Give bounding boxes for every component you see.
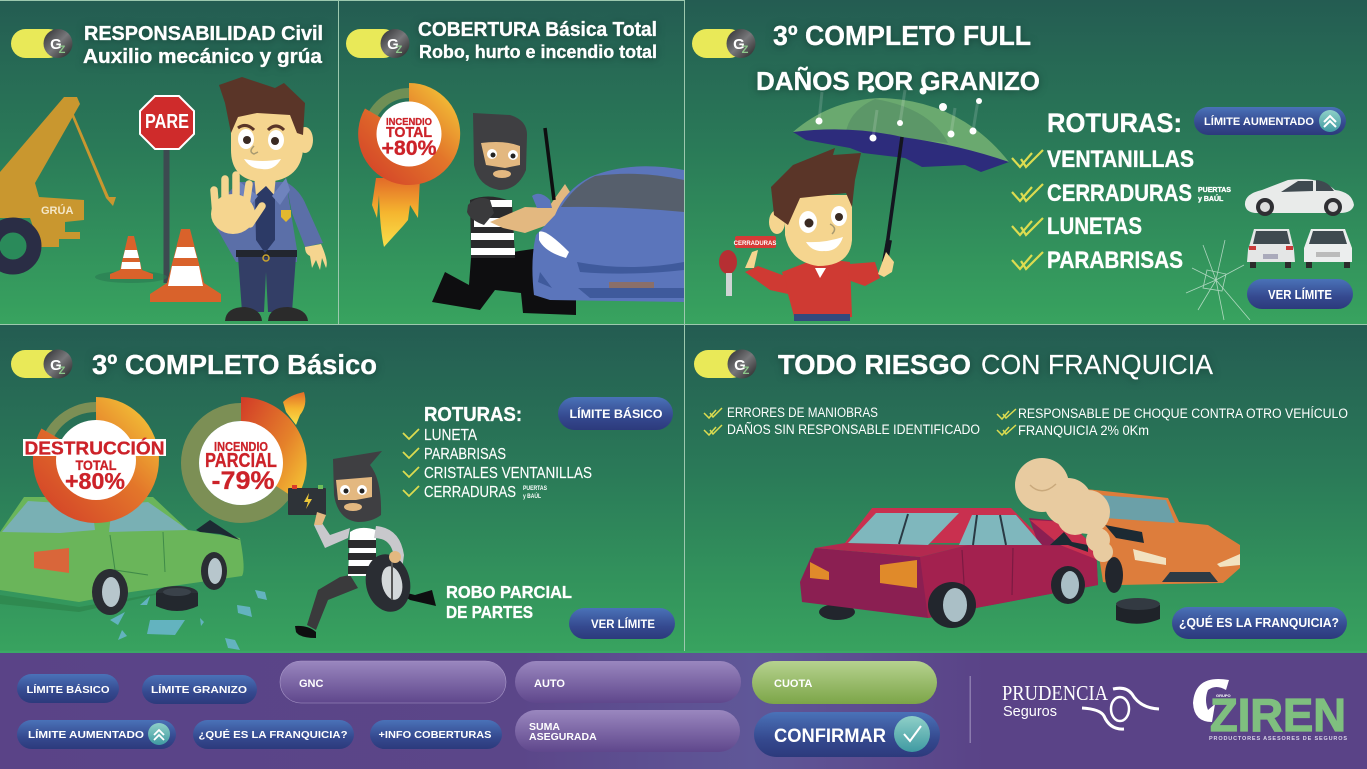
panel: todo riesgo con franquicia (685, 325, 1367, 652)
field: auto (515, 661, 741, 703)
button: limite aumentado: LÍMITE AUMENTADO (28, 728, 144, 741)
button: limite aumentado (17, 720, 176, 749)
stop sign (140, 96, 194, 283)
heading: Auxilio mecánico y grúa (83, 46, 323, 68)
toggle icon: Z (742, 44, 749, 56)
roturas list: PARABRISAS (1047, 247, 1183, 274)
card: cerraduras: CERRADURAS (734, 241, 776, 247)
roturas list: CERRADURAS (424, 484, 516, 501)
donut: destruccion total 80%: DESTRUCCIÓN (24, 438, 164, 458)
label: robo parcial: DE PARTES (446, 602, 533, 622)
heading: CON FRANQUICIA (981, 349, 1213, 380)
field: gnc: GNC (299, 678, 324, 690)
field: cuota (752, 661, 937, 704)
logo: prudencia seguros (1002, 681, 1159, 729)
label: robo parcial (446, 582, 572, 622)
heading (83, 23, 323, 68)
button: limite basico (558, 397, 673, 430)
toggle icon: G (734, 357, 746, 374)
button: limite aumentado: LÍMITE AUMENTADO (1204, 115, 1314, 128)
field: suma asegurada: SUMA (529, 721, 560, 733)
boy with keys (719, 148, 894, 321)
logo: prudencia seguros: Seguros (1003, 703, 1057, 720)
rear and front white cars (1247, 229, 1352, 268)
button: ver limite: VER LÍMITE (591, 616, 655, 631)
donut: incendio total 80% (358, 83, 460, 185)
heading: RESPONSABILIDAD Civil (84, 23, 323, 45)
field: cuota: CUOTA (774, 678, 812, 690)
roturas list: y BAÚL (523, 493, 541, 500)
button: info coberturas: +INFO COBERTURAS (378, 729, 492, 741)
tow truck: GRÚA (41, 204, 73, 217)
button: info coberturas (370, 720, 502, 749)
toggle icon (346, 29, 410, 58)
donut: destruccion total 80%: +80% (65, 468, 125, 494)
button: que es la franquicia: ¿QUÉ ES LA FRANQUICIA? (198, 728, 348, 741)
roturas list: y BAÚL (1198, 194, 1224, 203)
smoke cloud (1015, 458, 1113, 562)
panel: 3 completo basico (0, 325, 684, 652)
toggle icon: Z (743, 365, 750, 377)
donut: incendio parcial 79% (190, 392, 307, 514)
panel: cobertura basica total (339, 0, 684, 324)
button: limite granizo (142, 675, 257, 704)
flames (372, 178, 420, 247)
toggle icon: Z (396, 44, 403, 56)
logo: grupo ziren: PRODUCTORES ASESORES DE SEGUROS (1209, 736, 1347, 742)
toggle icon: G (50, 36, 62, 53)
loose tire (1116, 598, 1160, 624)
roturas list: VENTANILLAS (1047, 146, 1194, 173)
panel: responsabilidad civil (0, 0, 338, 324)
toggle icon: G (733, 36, 745, 53)
donut: incendio total 80%: INCENDIO (386, 116, 432, 128)
green damaged car (0, 497, 267, 650)
heading: COBERTURA Básica Total (418, 19, 657, 41)
footer bar (0, 652, 1367, 769)
toggle icon (11, 29, 72, 58)
traffic cones (95, 229, 221, 302)
roturas list: LUNETA (424, 427, 478, 444)
thief breaking into car (432, 113, 576, 315)
roturas list: ROTURAS: (424, 404, 522, 426)
logo: prudencia seguros: PRUDENCIA (1002, 681, 1109, 705)
button: que es la franquicia (193, 720, 354, 749)
button: limite basico: LÍMITE BÁSICO (570, 406, 662, 421)
donut: incendio parcial 79%: INCENDIO (214, 439, 268, 454)
panel: 3 completo full (685, 0, 1367, 324)
car battery (288, 485, 326, 515)
coverage checklist: DAÑOS SIN RESPONSABLE IDENTIFICADO (727, 422, 980, 437)
cracked glass (1186, 240, 1250, 320)
field: gnc (280, 661, 506, 703)
policeman character (211, 77, 327, 321)
heading: 3º COMPLETO Básico (92, 349, 377, 380)
donut: incendio parcial 79%: PARCIAL (205, 450, 277, 472)
logo: grupo ziren: GRUPO (1216, 693, 1231, 698)
button: ver limite: VER LÍMITE (1268, 287, 1332, 302)
coverage checklist: ERRORES DE MANIOBRAS (727, 405, 878, 420)
roturas list: PARABRISAS (424, 446, 506, 463)
toggle icon: Z (59, 44, 66, 56)
donut: incendio total 80%: +80% (382, 137, 437, 160)
button: ver limite (1247, 279, 1353, 309)
donut: destruccion total 80%: TOTAL (76, 457, 117, 473)
toggle icon (694, 350, 756, 378)
field: suma asegurada (515, 710, 740, 752)
label: robo parcial: ROBO PARCIAL (446, 582, 572, 602)
field: suma asegurada: ASEGURADA (529, 731, 597, 743)
donut: destruccion total 80% (23, 397, 166, 523)
roturas list: PUERTAS (1198, 187, 1231, 194)
toggle icon: G (387, 36, 399, 53)
white car with hail damage (1245, 179, 1354, 216)
card: cerraduras (734, 236, 776, 248)
roturas list: LUNETAS (1047, 213, 1142, 240)
donut: incendio parcial 79%: -79% (212, 467, 274, 495)
tow truck (0, 97, 116, 267)
button: confirmar (754, 712, 940, 757)
button: limite aumentado (1194, 107, 1346, 135)
roturas list: CERRADURAS (1047, 180, 1192, 207)
button: confirmar: CONFIRMAR (774, 726, 886, 747)
field: auto: AUTO (534, 678, 565, 690)
roturas list: CRISTALES VENTANILLAS (424, 465, 592, 482)
blue car (532, 166, 684, 302)
button: limite basico: LÍMITE BÁSICO (26, 683, 110, 696)
heading: 3º COMPLETO FULL (773, 20, 1031, 51)
roturas list (403, 404, 592, 501)
roturas list: PUERTAS (523, 486, 547, 492)
heading: TODO RIESGO (778, 349, 971, 380)
heading (418, 19, 657, 62)
logo: grupo ziren: ZIREN (1210, 689, 1346, 741)
heading (778, 349, 1213, 380)
coverage checklist: FRANQUICIA 2% 0Km (1018, 423, 1149, 438)
toggle icon: Z (59, 365, 66, 377)
heading: Robo, hurto e incendio total (419, 42, 657, 62)
button: limite basico (17, 674, 119, 703)
toggle icon (692, 29, 756, 58)
button: que es la franquicia (1172, 607, 1347, 639)
button: que es la franquicia: ¿QUÉ ES LA FRANQUICIA? (1179, 615, 1339, 630)
thief with tire (295, 451, 436, 638)
toggle icon (11, 350, 72, 378)
stop sign: PARE (145, 111, 189, 133)
subheading: granizo: DAÑOS POR GRANIZO (756, 66, 1040, 96)
button: limite granizo: LÍMITE GRANIZO (151, 683, 247, 696)
donut: incendio total 80%: TOTAL (386, 124, 432, 141)
roturas list (1012, 108, 1231, 274)
button: ver limite (569, 608, 675, 639)
coverage checklist (704, 405, 1348, 438)
toggle icon: G (50, 357, 62, 374)
red car (800, 508, 1098, 628)
roturas list: ROTURAS: (1047, 108, 1182, 138)
umbrella with hail (793, 86, 1009, 262)
orange car (1077, 488, 1240, 593)
